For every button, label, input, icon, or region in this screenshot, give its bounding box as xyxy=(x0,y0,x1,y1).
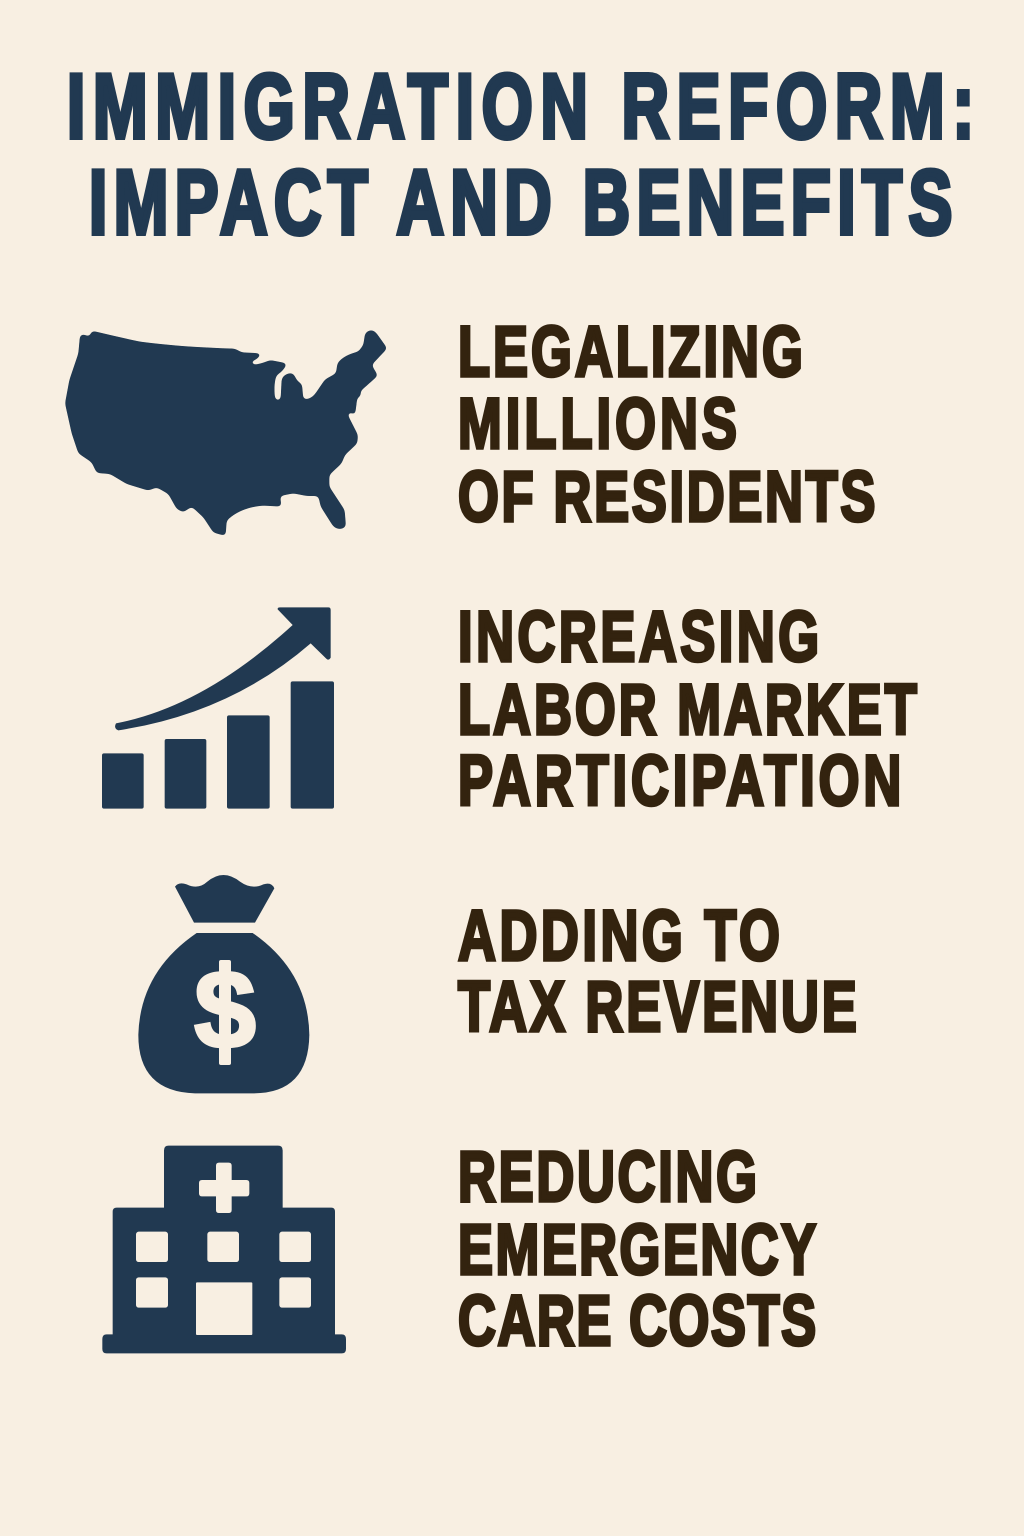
medical cross xyxy=(199,1163,249,1213)
text: increasing labor market participation: INCREASING xyxy=(458,597,819,677)
title: IMPACT AND BENEFITS xyxy=(89,151,952,253)
icon: United States map xyxy=(65,330,387,536)
text: increasing labor market participation: PARTICIPATION xyxy=(458,741,901,821)
door xyxy=(196,1282,252,1335)
text: reducing emergency care costs xyxy=(458,1137,816,1361)
text: legalizing millions of residents xyxy=(458,312,875,537)
text: increasing labor market participation: LABOR MARKET xyxy=(458,670,917,750)
text: legalizing millions of residents: LEGALIZING xyxy=(458,312,803,392)
text: increasing labor market participation xyxy=(458,597,917,821)
icon: money bag xyxy=(138,875,309,1093)
text: reducing emergency care costs: REDUCING xyxy=(458,1137,757,1217)
title xyxy=(67,55,974,253)
title: IMMIGRATION REFORM: xyxy=(67,55,974,157)
icon: money bag: $ xyxy=(194,947,256,1072)
text: legalizing millions of residents: MILLIONS xyxy=(458,384,737,464)
rising arrow xyxy=(115,607,331,730)
text: adding to tax revenue: ADDING TO xyxy=(458,896,780,976)
text: reducing emergency care costs: EMERGENCY xyxy=(458,1210,816,1290)
text: reducing emergency care costs: CARE COSTS xyxy=(458,1281,816,1361)
text: adding to tax revenue xyxy=(458,896,857,1047)
icon: bar chart with rising arrow xyxy=(102,607,334,809)
text: adding to tax revenue: TAX REVENUE xyxy=(458,967,857,1047)
bars xyxy=(102,681,334,809)
windows xyxy=(136,1232,311,1308)
icon: hospital xyxy=(102,1146,346,1353)
text: legalizing millions of residents: OF RESIDENTS xyxy=(458,457,875,537)
